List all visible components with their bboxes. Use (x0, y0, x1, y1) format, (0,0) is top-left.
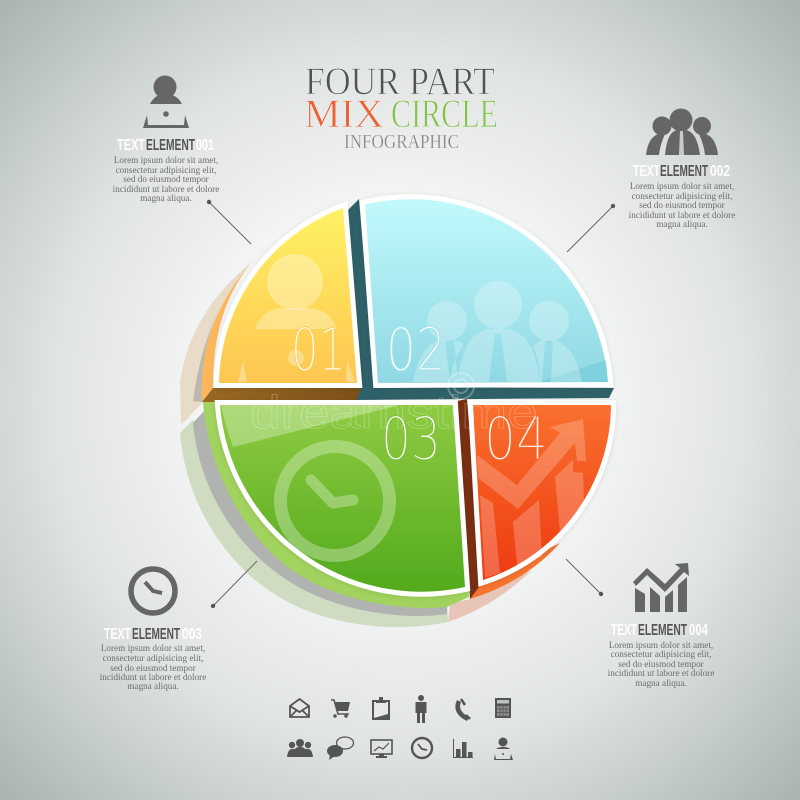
icon: phone (458, 699, 470, 719)
text block 004: 004 (689, 622, 708, 639)
text block 001: Lorem ipsum dolor sit amet, (114, 155, 218, 165)
icon: envelope (290, 699, 309, 717)
text block 001: TEXT (117, 137, 145, 154)
icon: clipboard (373, 697, 389, 719)
text block 002: consectetur adipisicing elit, (632, 191, 732, 201)
text block 002: TEXT (633, 163, 660, 180)
icon: team 002 (646, 108, 718, 155)
icon: user with laptop (494, 738, 513, 760)
text block 004: sed do eiusmod tempor (618, 659, 704, 669)
text block 002: magna aliqua. (656, 219, 708, 229)
icon: clock 003 (131, 569, 175, 613)
icon: team (287, 739, 313, 757)
text block 003: sed do eiusmod tempor (110, 663, 196, 673)
text block 003: 003 (182, 626, 202, 643)
pie shadows and side faces (180, 199, 614, 627)
text block 003: Lorem ipsum dolor sit amet, (101, 643, 205, 653)
number 03: 03 (381, 404, 441, 473)
text block 001: incididunt ut labore et dolore (113, 184, 219, 194)
watermark (250, 373, 538, 438)
orange side of red piece (470, 543, 560, 599)
bottom icon row 1 (290, 695, 511, 723)
text block 002: ELEMENT (660, 163, 708, 180)
text block 003: TEXT (104, 626, 131, 643)
pink shadow of red piece (448, 570, 532, 622)
icon: clock (280, 446, 390, 556)
number 02: 02 (386, 315, 446, 384)
text block 002: sed do eiusmod tempor (639, 200, 725, 210)
text block 001: ELEMENT (146, 137, 195, 154)
icon: rising chart (477, 419, 586, 578)
title (304, 60, 498, 153)
text block 003: magna aliqua. (127, 681, 179, 691)
text block 003: incididunt ut labore et dolore (100, 672, 206, 682)
icon: bar chart (453, 739, 473, 758)
grey shade of yellow piece (193, 265, 250, 402)
teal side of blue piece horizontal (356, 387, 614, 400)
grey shade of green piece (193, 410, 447, 616)
light green side of green piece (203, 400, 469, 608)
beige shadow of yellow piece (180, 262, 252, 425)
text block 004: incididunt ut labore et dolore (608, 668, 714, 678)
text block 003 (100, 626, 206, 691)
icon: monitor chart (371, 740, 392, 758)
text block 001: 001 (196, 137, 214, 154)
icon: person with laptop (238, 254, 355, 382)
icon: person (416, 695, 426, 723)
text block 001: sed do eiusmod tempor (123, 174, 209, 184)
title: MIX (304, 91, 384, 136)
panel: 02 blue slice (365, 199, 608, 384)
icon: rising chart 004 (633, 563, 689, 612)
orange side of yellow piece (202, 262, 252, 402)
text block 002: incididunt ut labore et dolore (629, 210, 735, 220)
panel: 01 yellow slice (219, 208, 357, 384)
text block 004: Lorem ipsum dolor sit amet, (609, 640, 713, 650)
icon: calculator (495, 698, 511, 718)
text block 003: consectetur adipisicing elit, (103, 653, 203, 663)
text block 004: magna aliqua. (635, 678, 687, 688)
number 01: 01 (291, 315, 346, 384)
icon: chat bubbles (327, 737, 354, 760)
number 04: 04 (484, 404, 548, 473)
teal side of blue piece vertical (348, 199, 375, 399)
text block 001: magna aliqua. (140, 193, 192, 203)
title: FOUR PART (305, 60, 495, 103)
text block 002: Lorem ipsum dolor sit amet, (630, 181, 734, 191)
watermark: dreamstime (250, 386, 538, 438)
title: CIRCLE (391, 91, 498, 136)
text block 004 (608, 622, 714, 688)
text block 003: ELEMENT (132, 626, 180, 643)
text block 004: consectetur adipisicing elit, (611, 649, 711, 659)
connector lines (207, 200, 615, 608)
light green shadow (180, 420, 448, 627)
icon: person with laptop 001 (143, 76, 189, 128)
text block 001 (113, 137, 219, 203)
icon: team of three (413, 281, 582, 382)
text block 004: TEXT (611, 622, 637, 639)
bottom icon row 2 (287, 737, 513, 760)
icon: cart (331, 700, 350, 718)
text block 001: consectetur adipisicing elit, (116, 165, 216, 175)
brown side of red piece (457, 399, 482, 599)
text block 002: 002 (710, 163, 730, 180)
brown side of yellow piece (202, 386, 364, 402)
panel: 03 green slice (220, 404, 465, 592)
text block 004: ELEMENT (638, 622, 687, 639)
text block 002 (629, 163, 735, 229)
title: INFOGRAPHIC (344, 132, 459, 153)
icon: clock small (412, 738, 432, 758)
panel: 04 red slice (473, 404, 611, 580)
